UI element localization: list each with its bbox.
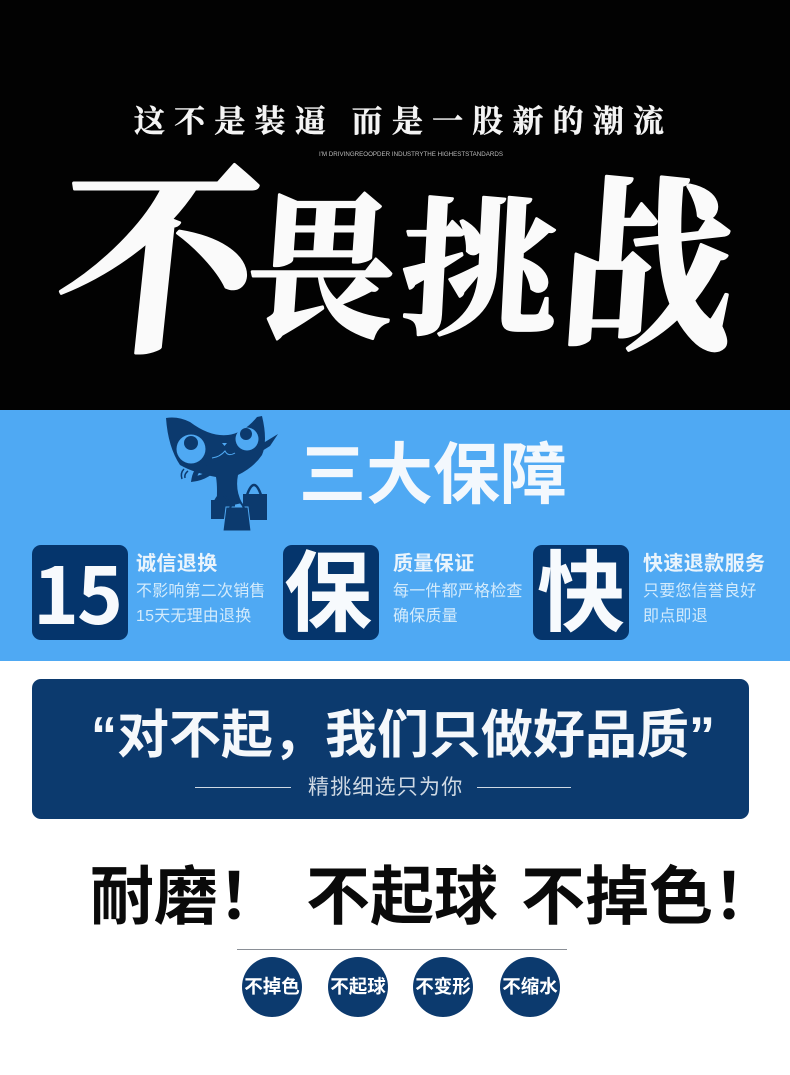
- text: fast refunds: 即点即退: [643, 608, 708, 625]
- hero title: 挑: [396, 152, 568, 364]
- hero artwork text: [44, 96, 745, 393]
- text: fast refunds: [643, 552, 765, 625]
- badge: no fading: [242, 957, 302, 1017]
- hero title: [44, 100, 745, 393]
- heading: durability claims: [90, 861, 777, 933]
- text: quality guarantee: 质量保证: [393, 553, 475, 575]
- badge: no shrinking: [500, 957, 560, 1017]
- badge: no deformation: 不变形: [415, 976, 471, 997]
- badge: no pilling: [328, 957, 388, 1017]
- hero title: 畏: [240, 145, 405, 370]
- hero small English line: I'M DRIVINGREOOPDER INDUSTRYTHE HIGHESTSTANDARDS: [319, 151, 504, 158]
- subtitle rule left: [195, 787, 291, 788]
- text: quality guarantee: 每一件都严格检查: [393, 583, 523, 600]
- heading: durability claims: 不掉色！: [521, 861, 777, 933]
- badge: no shrinking: 不缩水: [502, 976, 558, 997]
- heading: durability claims: 耐磨！: [90, 861, 282, 933]
- badge: no fading: 不掉色: [244, 976, 300, 997]
- text: honest returns: 15天无理由退换: [136, 608, 251, 625]
- divider line: [237, 949, 567, 950]
- text: fast refunds: 快速退款服务: [643, 553, 765, 575]
- icon: cat mascot with shopping bags: [166, 416, 278, 530]
- slogan heading: “对不起，我们只做好品质”: [91, 707, 715, 765]
- hero subtitle: 这不是装逼 而是一股新的潮流: [134, 96, 665, 141]
- panel: black hero banner: [0, 0, 790, 410]
- heading: three guarantees: 三大保障: [299, 438, 567, 513]
- text: quality guarantee: 确保质量: [393, 608, 458, 625]
- text: quality guarantee: [393, 552, 523, 625]
- badge: no pilling: 不起球: [330, 976, 386, 997]
- badge: no deformation: [413, 957, 473, 1017]
- hero title: 战: [552, 120, 745, 389]
- panel: navy quality slogan: [32, 679, 749, 819]
- panel: blue guarantee section: [0, 410, 790, 661]
- subtitle rule right: [477, 787, 571, 788]
- text: honest returns: 诚信退换: [136, 553, 218, 575]
- heading: durability claims: 不起球: [306, 861, 498, 933]
- text: honest returns: [136, 552, 266, 625]
- text: fast refunds: 只要您信誉良好: [643, 583, 756, 600]
- text: honest returns: 不影响第二次销售: [136, 583, 266, 600]
- slogan subtitle: 精挑细选只为你: [308, 776, 463, 799]
- hero title: 不: [44, 100, 281, 393]
